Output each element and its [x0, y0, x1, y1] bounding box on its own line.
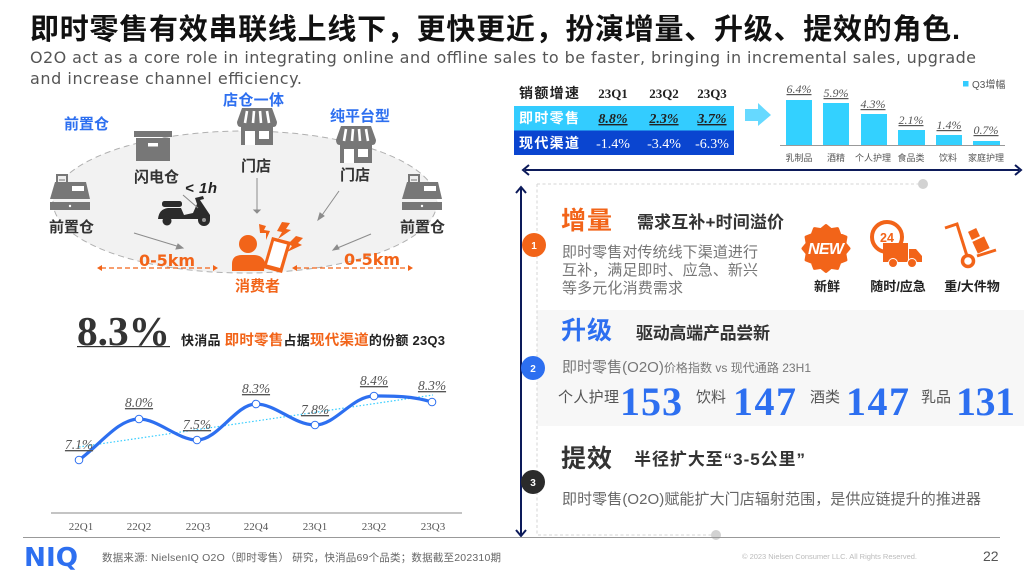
bar chart: Q3 growth by category: 个人护理: [855, 152, 891, 163]
panel: efficiency: [521, 445, 981, 508]
arrows to consumer: [134, 178, 371, 250]
body: 互补，满足即时、应急、新兴: [562, 261, 758, 279]
line chart: 22Q1: [69, 521, 93, 533]
title: 即时零售有效串联线上线下，更快更近，扮演增量、升级、提效的角色.: [30, 13, 960, 46]
line chart: 7.1%: [65, 437, 93, 452]
label: register right: 前置仓: [400, 218, 445, 236]
arrow: table to bars: [745, 103, 771, 126]
sales growth table: 8.8%: [598, 112, 628, 127]
label: anytime: 随时/应急: [870, 279, 926, 294]
sales growth table: 23Q3: [697, 86, 727, 101]
step badge 1: [522, 233, 546, 257]
heading: 升级: [561, 317, 612, 345]
icon: consumer with phone: [232, 222, 303, 273]
copyright: © 2023 Nielsen Consumer LLC. All Rights Reserved.: [742, 552, 917, 561]
price indices: 酒类: [810, 389, 840, 406]
icon: store right: [336, 126, 376, 163]
label: store centre: 门店: [241, 157, 271, 175]
price indices: [558, 379, 1015, 424]
body: [562, 244, 758, 297]
icon: 24h truck: [872, 222, 922, 268]
panel background: upgrade: [537, 310, 1024, 426]
icon: new badge: [803, 226, 849, 272]
icon: register right: [402, 174, 442, 210]
line chart: 22Q2: [127, 521, 151, 533]
sales growth table: 即时零售: [519, 110, 579, 126]
big share number: 8.3%: [77, 308, 170, 354]
coverage ellipse: [53, 131, 437, 273]
sales growth table: -3.4%: [647, 137, 681, 152]
line chart: 22Q3: [186, 521, 211, 533]
sales growth table: [514, 85, 734, 155]
price indices: 个人护理: [558, 389, 619, 406]
icon: flash warehouse box: [134, 131, 172, 161]
label: distance left: 0-5km: [139, 251, 195, 270]
bar chart: Q3 growth by category: 5.9%: [824, 86, 848, 100]
bar chart: Q3 growth by category: 酒精: [827, 152, 845, 163]
bar chart: Q3 growth by category: 1.4%: [936, 118, 962, 132]
legend: Q3增幅: [972, 78, 1005, 91]
sales growth table: 23Q2: [649, 86, 679, 101]
icon: 24h truck: 24: [880, 231, 894, 245]
bar chart: Q3 growth by category: 家庭护理: [968, 152, 1004, 163]
legend: [963, 78, 1005, 91]
label: heavy: 重/大件物: [944, 279, 1000, 294]
label: under one hour: < 1h: [185, 180, 217, 197]
panel: incremental: [522, 207, 1000, 297]
heading: 提效: [561, 445, 612, 473]
bar chart: Q3 growth by category: [780, 78, 1005, 163]
label: store right: 门店: [340, 166, 370, 184]
NIQ logo: NIQ: [24, 543, 78, 573]
dashed range arrows: [97, 265, 413, 271]
line chart: 7.8%: [301, 402, 329, 417]
icon: hand trolley: [945, 224, 996, 266]
sales growth table: -1.4%: [596, 137, 630, 152]
step badge 2: [521, 356, 545, 380]
body: 即时零售(O2O)价格指数 vs 现代通路 23H1: [562, 359, 811, 376]
panel: upgrade: [521, 317, 1015, 424]
body: 即时零售(O2O)赋能扩大门店辐射范围，是供应链提升的推进器: [562, 490, 981, 508]
english subtitle: O2O act as a core role in integrating online and offline sales to be faster, bringing in incremental sales, upgrade: [30, 48, 976, 67]
sales growth table: 销额增速: [519, 85, 579, 101]
icon: scooter: [158, 195, 210, 226]
icon: register left: [50, 174, 90, 210]
price indices: 147: [733, 379, 796, 424]
arrow: vertical double: [516, 187, 526, 536]
label: fresh: 新鲜: [814, 279, 840, 294]
label: platform type: 纯平台型: [330, 107, 390, 125]
price indices: 147: [846, 379, 909, 424]
line chart: 8.3%: [418, 378, 446, 393]
label: register left: 前置仓: [49, 218, 94, 236]
label: front warehouse type: 前置仓: [64, 115, 109, 133]
dashed frame: [537, 179, 928, 540]
line chart: 23Q3: [421, 521, 446, 533]
subheading: 驱动高端产品尝新: [636, 323, 770, 343]
subheading: 需求互补+时间溢价: [637, 213, 784, 232]
sales growth table: -6.3%: [695, 137, 729, 152]
bar chart: Q3 growth by category: 4.3%: [860, 97, 886, 111]
icon: store centre: [237, 108, 277, 145]
panel: fulfilment diagram: [49, 91, 445, 295]
label: store warehouse type: 店仓一体: [223, 91, 284, 109]
line chart: [51, 373, 462, 533]
english subtitle: and increase channel efficiency.: [30, 69, 302, 88]
heading: 增量: [561, 207, 612, 235]
english subtitle: [30, 48, 976, 88]
bar chart: Q3 growth by category: 2.1%: [898, 113, 924, 127]
arrow: horizontal double: [523, 165, 1021, 175]
sales growth table: 3.7%: [696, 112, 727, 127]
label: distance right: 0-5km: [344, 250, 400, 269]
label: flash warehouse: 闪电仓: [134, 168, 179, 186]
source note: 数据来源: NielsenIQ O2O（即时零售） 研究，快消品69个品类；数据截至202310期: [102, 551, 501, 564]
footer rule: [23, 537, 1000, 538]
step badge 3: [521, 470, 545, 494]
body: 等多元化消费需求: [562, 279, 683, 297]
line chart: 23Q1: [303, 521, 327, 533]
bar chart: Q3 growth by category: 食品类: [897, 152, 925, 163]
price indices: 153: [620, 379, 682, 424]
share description: 快消品 即时零售占据现代渠道的份额 23Q3: [181, 331, 445, 349]
price indices: 131: [956, 379, 1015, 424]
icon: new badge: NEW: [808, 241, 846, 258]
line chart: 22Q4: [244, 521, 269, 533]
line chart: 7.5%: [183, 417, 211, 432]
line chart: 23Q2: [362, 521, 386, 533]
line chart: 8.4%: [360, 373, 388, 388]
bar chart: Q3 growth by category: 饮料: [939, 152, 957, 163]
price indices: 饮料: [696, 389, 726, 406]
sales growth table: 2.3%: [648, 112, 679, 127]
subheading: 半径扩大至“3-5公里”: [634, 450, 805, 469]
line chart: 8.3%: [242, 381, 270, 396]
step badge 1: 1: [531, 241, 537, 252]
body: 即时零售对传统线下渠道进行: [562, 244, 758, 261]
sales growth table: 现代渠道: [519, 135, 579, 151]
bar chart: Q3 growth by category: 0.7%: [974, 123, 998, 137]
bar chart: Q3 growth by category: 乳制品: [785, 152, 813, 163]
label: consumer: 消费者: [235, 277, 280, 295]
sales growth table: 23Q1: [598, 86, 628, 101]
step badge 3: 3: [530, 478, 536, 489]
line chart: 8.0%: [125, 395, 153, 410]
page number: 22: [983, 548, 999, 564]
step badge 2: 2: [530, 364, 536, 375]
price indices: 乳品: [921, 389, 951, 406]
bar chart: Q3 growth by category: 6.4%: [786, 82, 812, 96]
